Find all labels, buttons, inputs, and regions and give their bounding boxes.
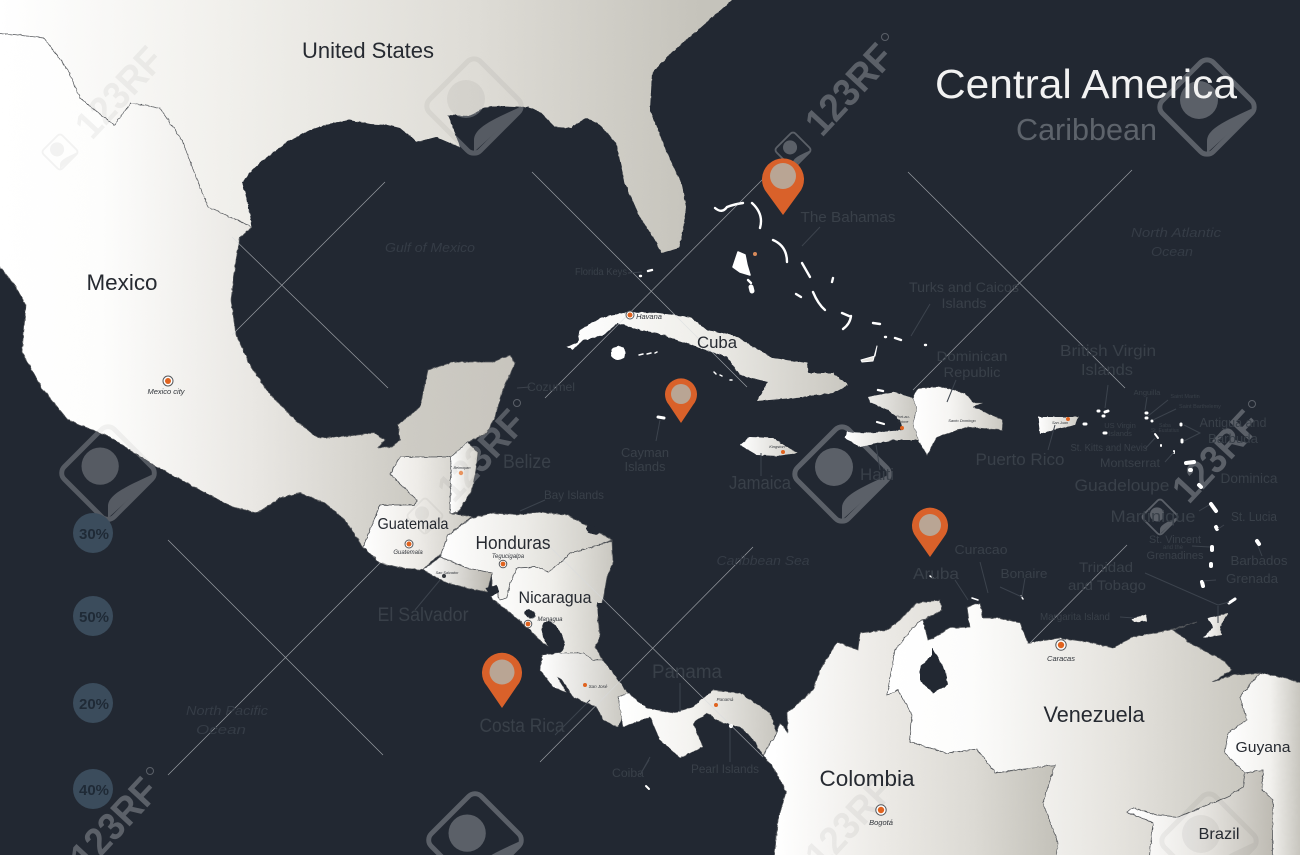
capital labels: Caracas bbox=[1047, 654, 1075, 663]
faint labels on ocean: Florida Keys bbox=[575, 267, 627, 278]
faint labels on ocean bbox=[378, 209, 1288, 780]
faint labels on ocean: and Tobago bbox=[1068, 577, 1146, 593]
sea and ocean labels: Caribbean Sea bbox=[716, 553, 810, 568]
sea and ocean labels: North Pacific bbox=[186, 703, 269, 718]
faint labels on ocean: The Bahamas bbox=[800, 209, 896, 226]
capital labels bbox=[147, 312, 1075, 827]
faint labels on ocean: Dominican bbox=[936, 348, 1008, 364]
subtitle: Caribbean bbox=[1016, 112, 1157, 147]
faint labels on ocean: Costa Rica bbox=[480, 716, 565, 737]
capital labels: Port-au- bbox=[896, 415, 911, 419]
watermarks under land: 123RF bbox=[1164, 403, 1269, 511]
badge: 50% bbox=[73, 596, 113, 636]
faint labels on ocean: Aruba bbox=[913, 566, 959, 583]
faint labels on ocean: Bay Islands bbox=[544, 488, 604, 502]
land: Isle of Youth bbox=[611, 346, 625, 360]
land: Venezuela bbox=[887, 603, 1260, 855]
faint labels on ocean: Panama bbox=[652, 662, 722, 683]
faint labels on ocean: Republic bbox=[944, 364, 1000, 380]
land: Belize bbox=[450, 442, 478, 513]
land: Mexico bbox=[0, 33, 515, 547]
watermarks over land (faint): 123RF bbox=[429, 402, 534, 510]
watermarks over land (faint): 123RF bbox=[67, 39, 172, 147]
faint labels on ocean: Cayman bbox=[621, 445, 669, 460]
capital labels: Prince bbox=[898, 420, 908, 424]
faint labels on ocean: Belize bbox=[503, 452, 551, 473]
country labels on land: Colombia bbox=[820, 766, 915, 791]
country labels on land: Brazil bbox=[1198, 826, 1240, 843]
faint labels on ocean: Islands bbox=[1108, 429, 1132, 438]
land: Guatemala bbox=[363, 457, 472, 570]
sea and ocean labels: Gulf of Mexico bbox=[385, 240, 475, 255]
faint labels on ocean: Dominica bbox=[1220, 470, 1278, 486]
islands: Bahamas and Caribbean small islands bbox=[639, 203, 1259, 789]
capital labels: San Juan bbox=[1052, 421, 1068, 425]
land: Puerto Rico bbox=[1038, 417, 1078, 434]
country labels on land: United States bbox=[302, 38, 434, 63]
sea and ocean labels: Ocean bbox=[1151, 244, 1193, 259]
faint labels on ocean: Martinique bbox=[1110, 507, 1196, 526]
faint labels on ocean: US Virgin bbox=[1104, 421, 1136, 430]
land: Costa Rica bbox=[540, 653, 628, 727]
land: Colombia bbox=[763, 600, 1058, 855]
country labels on land: Cuba bbox=[697, 333, 738, 352]
capital markers bbox=[163, 252, 1070, 815]
faint labels on ocean: Grenada bbox=[1226, 571, 1279, 586]
capital labels: Mexico city bbox=[147, 387, 186, 396]
faint labels on ocean: Antigua and bbox=[1200, 415, 1266, 430]
faint labels on ocean: St. Eustatius bbox=[1151, 428, 1180, 434]
faint labels on ocean: Islands bbox=[624, 459, 666, 474]
land: Jamaica bbox=[740, 437, 798, 456]
faint labels on ocean: Barbados bbox=[1230, 553, 1288, 568]
faint labels on ocean: Cozumel bbox=[527, 380, 575, 394]
percent badges bbox=[73, 513, 113, 809]
badge: 40% bbox=[73, 769, 113, 809]
faint labels on ocean: Margarita Island bbox=[1040, 611, 1110, 623]
faint labels on ocean: Puerto Rico bbox=[976, 450, 1064, 469]
faint labels on ocean: St. Vincent bbox=[1149, 534, 1201, 546]
faint labels on ocean: Jamaica bbox=[729, 473, 792, 493]
sea and ocean labels bbox=[186, 225, 1222, 737]
land: Cuba bbox=[567, 312, 848, 401]
capital labels: Bogotá bbox=[869, 818, 893, 827]
capital labels: Tegucigalpa bbox=[492, 554, 525, 560]
faint labels on ocean: Saint Martin bbox=[1170, 394, 1200, 400]
faint labels on ocean: Bonaire bbox=[1000, 566, 1048, 581]
capital labels: Managua bbox=[537, 617, 563, 623]
sea and ocean labels: Ocean bbox=[196, 722, 246, 737]
faint labels on ocean: Turks and Caicos bbox=[909, 279, 1019, 295]
faint labels on ocean: and the bbox=[1163, 545, 1184, 551]
badge: 50%: 50% bbox=[79, 609, 109, 626]
land: Dominican Republic bbox=[913, 387, 1003, 455]
map pin: Costa Rica bbox=[482, 653, 522, 708]
faint labels on ocean: Pearl Islands bbox=[691, 762, 759, 776]
watermarks under land: 123RF bbox=[429, 402, 534, 510]
country labels on land: Guatemala bbox=[378, 516, 449, 533]
sea and ocean labels: North Atlantic bbox=[1131, 225, 1222, 240]
capital labels: San José bbox=[589, 684, 608, 689]
capital labels: Havana bbox=[636, 312, 662, 321]
badge: 30% bbox=[73, 513, 113, 553]
title: Central America bbox=[935, 61, 1237, 107]
land: Honduras bbox=[440, 512, 612, 600]
watermark diagonal lines bbox=[168, 170, 1132, 775]
map pin: Cayman bbox=[665, 378, 697, 423]
country labels on land: Nicaragua bbox=[518, 588, 592, 607]
faint labels on ocean: El Salvador bbox=[378, 605, 469, 626]
faint labels on ocean: British Virgin bbox=[1060, 343, 1156, 360]
faint labels on ocean: Saint Barthelemy bbox=[1179, 404, 1221, 410]
land: Panama bbox=[618, 690, 777, 758]
faint labels on ocean: Curacao bbox=[954, 542, 1008, 557]
faint labels on ocean: Anguilla bbox=[1134, 388, 1161, 397]
faint labels on ocean: Coiba bbox=[612, 768, 645, 780]
capital labels: Kingston bbox=[769, 444, 786, 449]
faint labels on ocean: Islands bbox=[1081, 362, 1133, 379]
country labels on land: Mexico bbox=[86, 270, 158, 295]
faint labels on ocean: Guadeloupe bbox=[1074, 476, 1170, 495]
badge: 20%: 20% bbox=[79, 696, 109, 713]
faint labels on ocean: Grenadines bbox=[1146, 550, 1204, 562]
map pin: Bahamas bbox=[762, 158, 804, 215]
capital labels: Panamá bbox=[717, 697, 734, 702]
faint labels on ocean: Islands bbox=[942, 295, 986, 311]
country labels on land: Venezuela bbox=[1044, 702, 1145, 727]
faint labels on ocean: Montserrat bbox=[1100, 456, 1161, 470]
capital labels: Guatemala bbox=[393, 550, 423, 556]
map pin: Aruba bbox=[912, 508, 948, 557]
faint labels on ocean: St. Lucia bbox=[1231, 509, 1278, 524]
faint labels on ocean: Barbuda bbox=[1208, 431, 1259, 446]
capital labels: Belmopan bbox=[453, 466, 471, 470]
capital labels: Santo Domingo bbox=[948, 418, 977, 423]
country labels on land: Honduras bbox=[476, 533, 550, 553]
faint labels on ocean: Saba bbox=[1159, 423, 1171, 429]
title bbox=[935, 61, 1237, 147]
land: Trinidad bbox=[1203, 613, 1228, 638]
lakes bbox=[486, 524, 948, 693]
capital labels: San Salvador bbox=[436, 571, 459, 575]
faint labels on ocean: St. Kitts and Nevis bbox=[1070, 443, 1148, 454]
land: Nicaragua bbox=[490, 541, 613, 660]
land: United States bbox=[0, 0, 752, 253]
watermarks under land: 123RF bbox=[797, 36, 902, 144]
faint labels on ocean: Haiti bbox=[860, 465, 894, 484]
badge: 30%: 30% bbox=[79, 526, 109, 543]
land: Brazil bbox=[1127, 770, 1273, 855]
leader lines bbox=[415, 227, 1262, 775]
land: Haiti bbox=[845, 392, 918, 447]
badge: 40%: 40% bbox=[79, 782, 109, 799]
land: Guyana bbox=[1225, 673, 1300, 855]
land: Margarita Island bbox=[1132, 614, 1147, 622]
country labels on land: Guyana bbox=[1236, 739, 1291, 756]
land: El Salvador bbox=[423, 557, 492, 592]
badge: 20% bbox=[73, 683, 113, 723]
faint labels on ocean: Trinidad bbox=[1079, 559, 1133, 575]
